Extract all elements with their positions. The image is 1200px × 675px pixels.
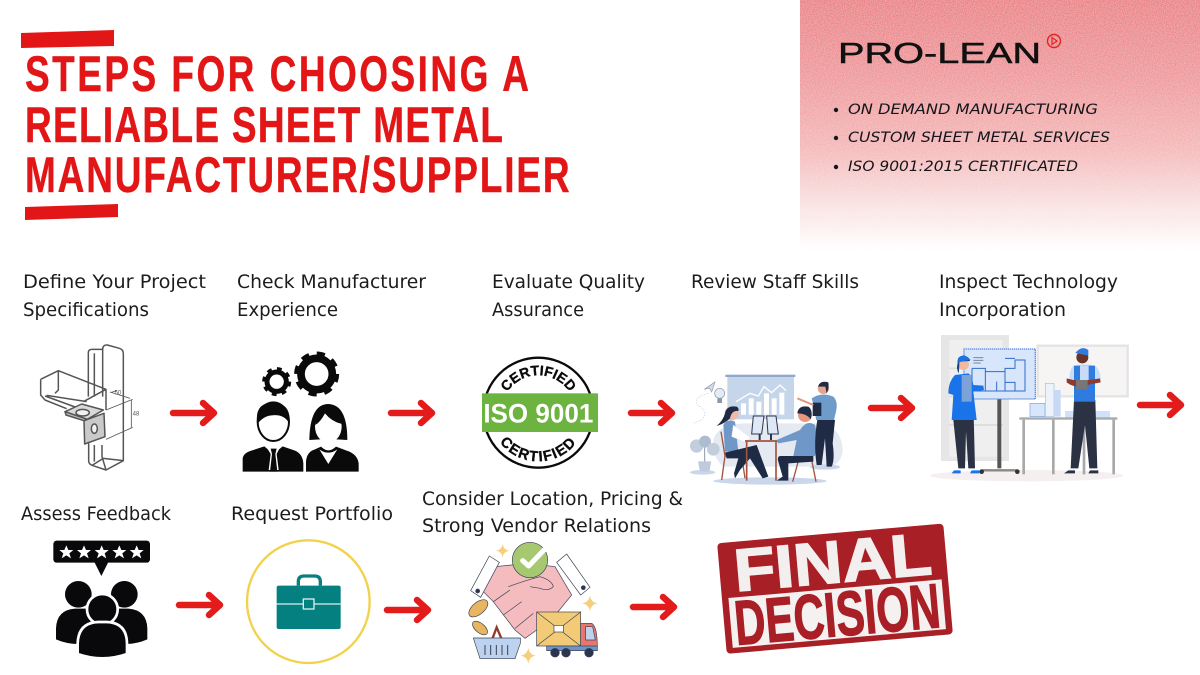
icon: people with gears xyxy=(243,354,359,472)
step label: location and pricing: Consider Location, Pricing & xyxy=(422,488,683,510)
step label: manufacturer experience xyxy=(237,271,426,321)
step label: technology: Incorporation xyxy=(939,299,1066,321)
icon: customer feedback xyxy=(53,541,150,658)
arrow xyxy=(631,403,672,423)
step label: staff skills: Review Staff Skills xyxy=(691,271,859,293)
step label: technology: Inspect Technology xyxy=(939,271,1118,293)
icon: staff meeting illustration xyxy=(690,375,843,485)
stamp: final decision: FINAL xyxy=(731,520,934,604)
icon: sheet metal bracket xyxy=(41,345,140,470)
step label: quality assurance: Evaluate Quality xyxy=(492,271,645,293)
step label: portfolio: Request Portfolio xyxy=(231,503,393,525)
stamp: final decision xyxy=(717,519,953,660)
step label: quality assurance: Assurance xyxy=(492,299,584,321)
service list xyxy=(834,102,1110,175)
arrow xyxy=(871,398,912,418)
step label: manufacturer experience: Experience xyxy=(237,299,338,321)
arrow xyxy=(179,595,220,615)
icon: ISO 9001 badge: CERTIFIED xyxy=(501,437,574,462)
arrow xyxy=(387,600,428,620)
icon: ISO 9001 badge: CERTIFIED xyxy=(502,365,576,390)
arrow xyxy=(173,403,214,423)
step label: location and pricing xyxy=(422,488,683,537)
step label: define specifications: Define Your Project xyxy=(23,271,206,293)
step label: manufacturer experience: Check Manufacturer xyxy=(237,271,426,293)
service list: ON DEMAND MANUFACTURING xyxy=(848,102,1098,118)
title xyxy=(21,30,570,220)
icon: portfolio briefcase xyxy=(247,540,370,663)
panel: brand header xyxy=(800,0,1200,250)
logo: PRO-LEAN: PRO-LEAN xyxy=(838,38,1041,70)
service list: CUSTOM SHEET METAL SERVICES xyxy=(848,130,1110,146)
step label: define specifications: Specifications xyxy=(23,299,149,321)
service list: ISO 9001:2015 CERTIFICATED xyxy=(848,159,1078,175)
stamp: final decision: DECISION xyxy=(732,571,943,659)
icon: sheet metal bracket: 50 xyxy=(115,390,122,396)
step label: define specifications xyxy=(23,271,206,321)
step label: technology xyxy=(939,271,1118,321)
step label: location and pricing: Strong Vendor Relations xyxy=(422,515,651,537)
icon: ISO 9001 badge: ISO 9001 xyxy=(483,399,593,429)
icon: technology blueprint illustration xyxy=(930,335,1128,481)
icon: ISO 9001 badge xyxy=(482,356,598,469)
icon: handshake with delivery xyxy=(466,542,598,664)
logo: PRO-LEAN xyxy=(838,34,1060,70)
arrow xyxy=(391,403,432,423)
arrow xyxy=(633,597,674,617)
step label: feedback: Assess Feedback xyxy=(21,503,171,525)
icon: sheet metal bracket: 48 xyxy=(133,411,140,417)
arrow xyxy=(1140,395,1181,415)
title: RELIABLE SHEET METAL xyxy=(25,98,503,153)
title: MANUFACTURER/SUPPLIER xyxy=(25,148,570,203)
title: STEPS FOR CHOOSING A xyxy=(25,47,529,102)
step label: quality assurance xyxy=(492,271,645,321)
